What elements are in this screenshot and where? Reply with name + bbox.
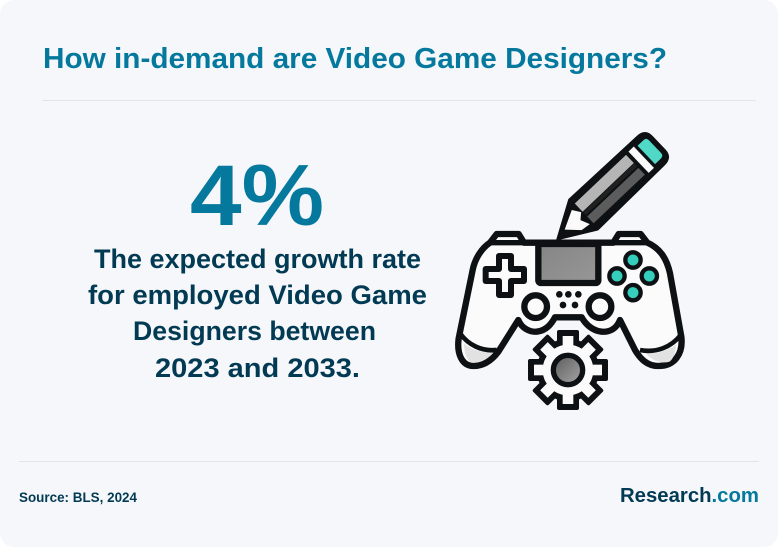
face buttons	[609, 252, 657, 300]
bumpers	[490, 235, 647, 251]
d-pad	[486, 256, 524, 295]
center dots	[556, 291, 582, 308]
icon: gear	[525, 327, 611, 413]
source: Source: BLS, 2024	[19, 490, 137, 505]
description text: 2023 and 2033.	[155, 353, 360, 383]
logo: Research.com: Research.com	[620, 484, 759, 507]
icon: game controller with pencil and gear	[458, 128, 682, 413]
grips	[464, 343, 493, 363]
icon: controller body	[458, 234, 682, 366]
statistic: 4%: 4%	[190, 148, 324, 244]
description text: The expected growth rate	[94, 244, 421, 274]
description text	[88, 244, 427, 383]
description text: Designers between	[133, 316, 376, 346]
icon: pencil	[543, 128, 673, 254]
analog sticks	[524, 295, 611, 318]
screen	[538, 244, 598, 283]
title: How in-demand are Video Game Designers?	[43, 43, 667, 75]
description text: for employed Video Game	[88, 280, 427, 310]
